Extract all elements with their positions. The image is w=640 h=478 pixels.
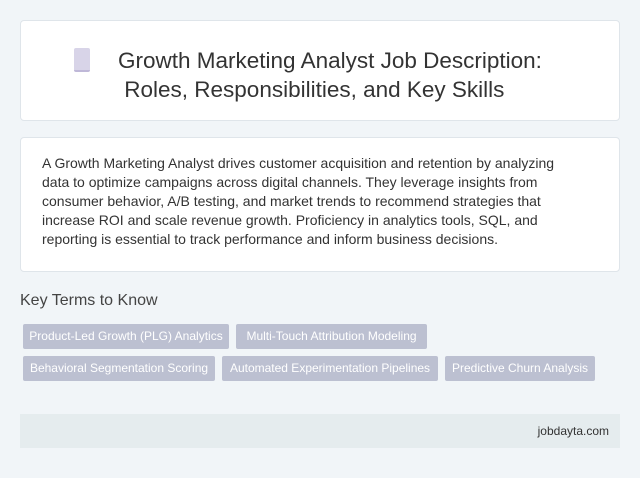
tag 3: Behavioral Segmentation Scoring bbox=[30, 361, 208, 375]
tag 5: Predictive Churn Analysis bbox=[452, 361, 588, 375]
title: Growth Marketing Analyst Job Description: bbox=[118, 48, 542, 73]
tag 3 bbox=[23, 356, 215, 381]
heading: key terms: Key Terms to Know bbox=[20, 292, 158, 309]
title card bbox=[20, 20, 620, 121]
footer bbox=[20, 414, 620, 448]
tag 5 bbox=[445, 356, 595, 381]
description text: A Growth Marketing Analyst drives customer acquisition and retention by analyzing data to optimize campaigns across digital channels. They leverage insights from consumer behavior, A/B testing, and market trends to recommend strategies that increase ROI and scale revenue growth. Proficiency in analytics tools, SQL, and reporting is essential to track performance and inform business decisions. bbox=[42, 155, 554, 247]
footer source: jobdayta.com bbox=[538, 424, 609, 438]
tag 4 bbox=[222, 356, 438, 381]
title bbox=[118, 48, 542, 102]
description card bbox=[20, 137, 620, 272]
tag 4: Automated Experimentation Pipelines bbox=[230, 361, 430, 375]
title: Roles, Responsibilities, and Key Skills bbox=[124, 77, 504, 102]
tag 1: Product-Led Growth (PLG) Analytics bbox=[29, 329, 223, 343]
icon: document bbox=[74, 48, 90, 72]
tag 2 bbox=[236, 324, 427, 349]
tag 1 bbox=[23, 324, 229, 349]
tag 2: Multi-Touch Attribution Modeling bbox=[246, 329, 417, 343]
